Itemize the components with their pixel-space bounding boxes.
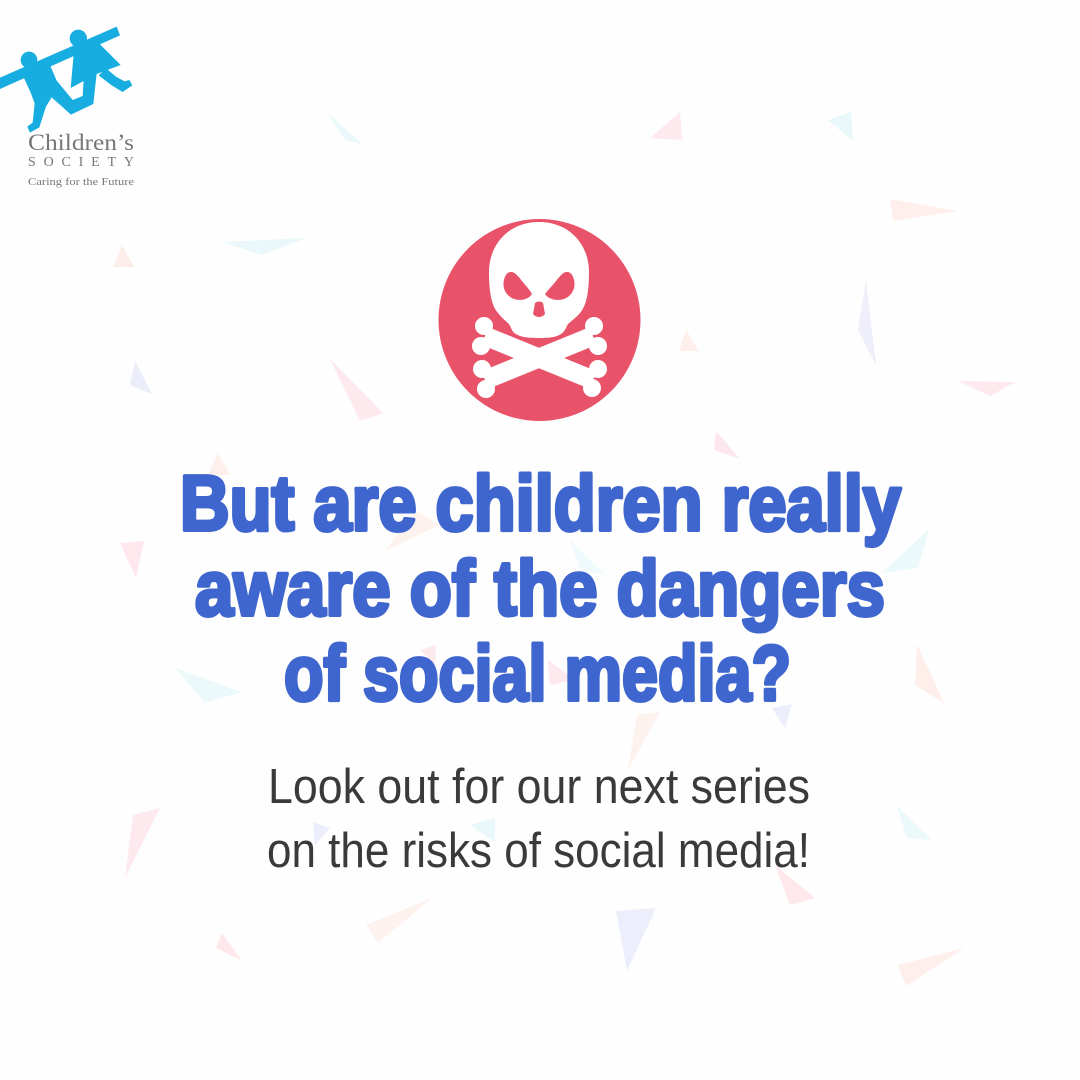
subtitle text	[267, 760, 810, 878]
subtitle text: on the risks of social media!	[267, 824, 810, 878]
title: of social media?	[284, 629, 791, 717]
logo wordmark: Children’s	[28, 130, 134, 155]
logo tagline: Caring for the Future	[28, 177, 134, 188]
icon: two children holding hands	[0, 27, 132, 133]
title: aware of the dangers	[195, 544, 885, 632]
crossbones	[472, 317, 607, 398]
subtitle text: Look out for our next series	[268, 760, 810, 814]
logo subword: SOCIETY	[28, 155, 134, 170]
icon: skull and crossbones	[438, 219, 640, 421]
title	[180, 459, 901, 717]
title: But are children really	[180, 459, 901, 547]
skull	[489, 222, 589, 338]
skull eyes and nose	[503, 272, 575, 317]
logo: Children's Society	[0, 27, 134, 188]
